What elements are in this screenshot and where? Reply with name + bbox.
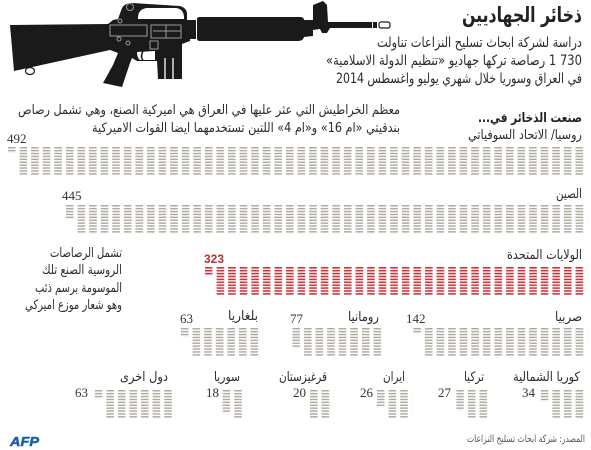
chart row: United States 323: [204, 248, 587, 296]
side note: [25, 246, 122, 313]
chart row: other countries 63: 63: [75, 385, 88, 400]
chart row: Iran 26: ايران: [383, 370, 405, 385]
chart row: other countries 63: [75, 370, 176, 419]
side note: الروسية الصنع تلك: [42, 263, 122, 278]
chart row: Romania 77: [290, 310, 385, 357]
chart row: Iran 26: [360, 370, 412, 419]
chart row: Kyrgyzstan 20: 20: [293, 385, 306, 400]
chart row: Bulgaria 63: [180, 309, 262, 357]
chart row: other countries 63: دول اخرى: [120, 370, 168, 385]
side note: تشمل الرصاصات: [50, 246, 122, 261]
chart row: North Korea 34: [513, 370, 587, 419]
chart row: North Korea 34: كوريا الشمالية: [513, 370, 581, 385]
intro text block: ⁦1 730⁩ رصاصة تركها جهاديو «تنظيم الدولة الاسلامية»: [326, 53, 582, 69]
chart row: Russia 492: [7, 128, 587, 176]
chart row: China 445: الصين: [556, 187, 582, 202]
chart row: Romania 77: 77: [290, 311, 304, 326]
chart row: Serbia 142: 142: [406, 311, 426, 326]
chart row: Turkey 27: [438, 370, 491, 419]
chart row: Syria 18: [206, 370, 246, 419]
chart row: Serbia 142: صربيا: [555, 310, 582, 325]
chart row: Syria 18: سوريا: [214, 370, 240, 385]
chart row: Kyrgyzstan 20: [279, 370, 333, 419]
AFP logo: AFP: [9, 435, 40, 449]
intro text block: [326, 35, 582, 87]
chart row: North Korea 34: 34: [522, 385, 536, 400]
chart row: Romania 77: رومانيا: [348, 310, 379, 325]
side note: الموسومة برسم ذئب: [35, 281, 122, 296]
chart row: Serbia 142: [406, 310, 587, 357]
side note: وهو شعار موزع اميركي: [25, 298, 122, 313]
body text block: معظم الخراطيش التي عثر عليها في العراق هي اميركية الصنع، وهي تشمل رصاص: [18, 103, 400, 118]
chart row: China 445: [62, 187, 587, 234]
chart row: Bulgaria 63: بلغاريا: [228, 309, 258, 324]
chart row: Russia 492: 492: [7, 131, 26, 146]
chart row: Bulgaria 63: 63: [180, 311, 193, 326]
chart row: Syria 18: 18: [206, 385, 219, 400]
chart row: China 445: 445: [62, 188, 82, 203]
body text block: [18, 103, 400, 136]
chart row: United States 323: 323: [204, 252, 224, 266]
chart row: Turkey 27: تركيا: [464, 370, 484, 385]
body text block: بندقيتي «ام 16» و«ام 4» اللتين تستخدمهما ايضا القوات الاميركية: [92, 121, 400, 136]
chart row: Turkey 27: 27: [438, 385, 452, 400]
chart row: Iran 26: 26: [360, 385, 374, 400]
chart row: Kyrgyzstan 20: قرغيزستان: [279, 370, 327, 385]
icon: assault rifle: [10, 1, 390, 87]
